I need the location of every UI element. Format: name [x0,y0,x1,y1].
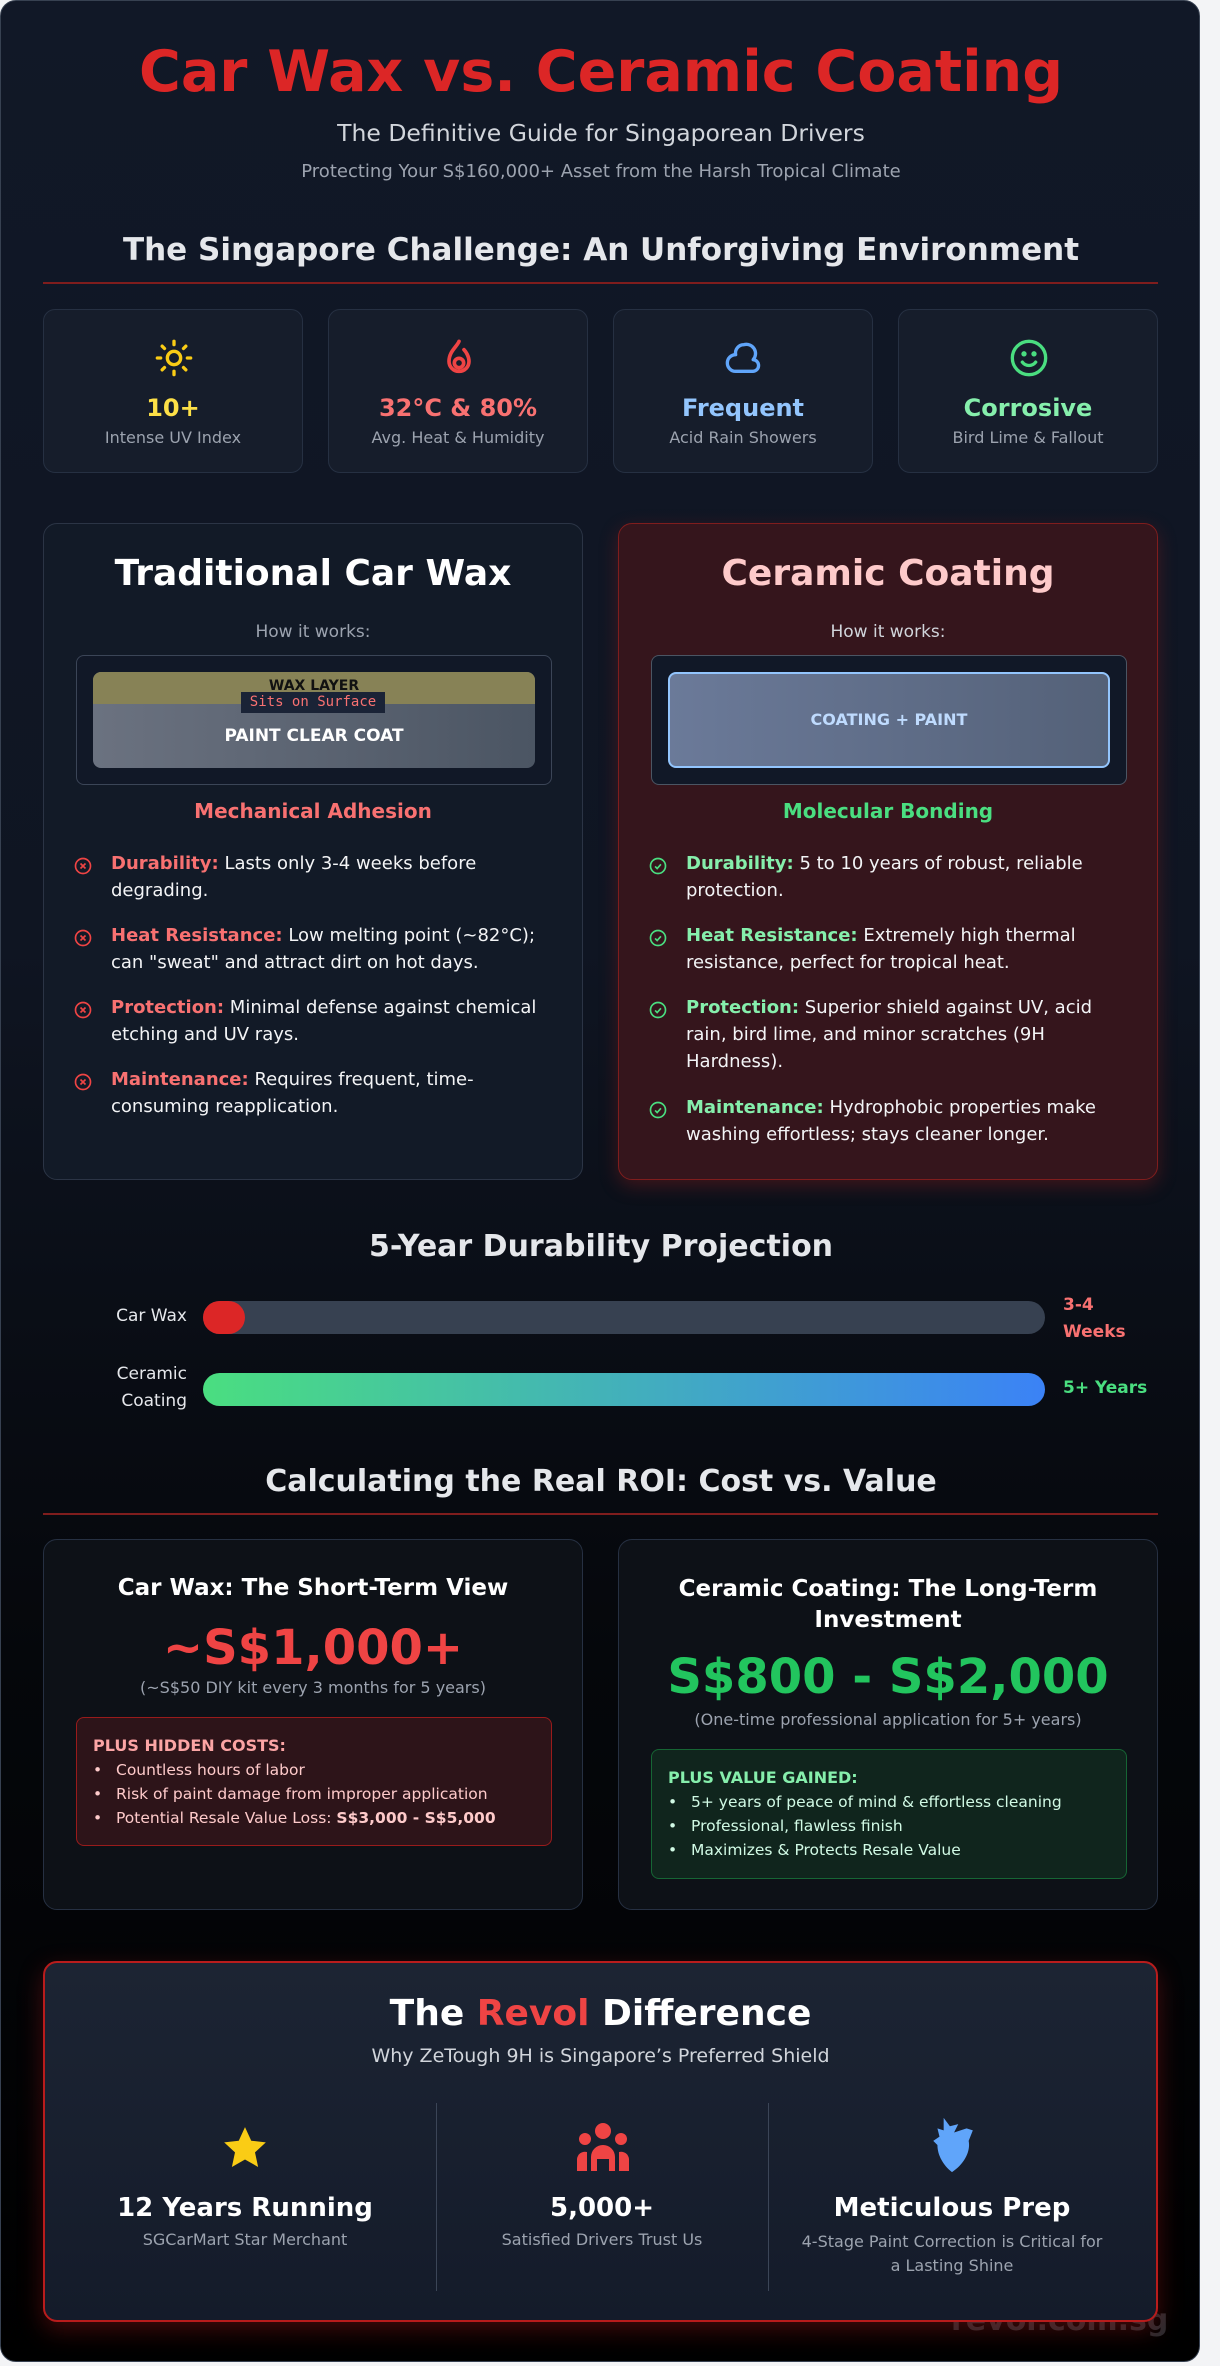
icon: shield [933,2118,973,2172]
value gained box: Maximizes & Protects Resale Value [691,1841,961,1859]
tagline: Protecting Your S$160,000+ Asset from the Harsh Tropical Climate [301,161,901,182]
value gained box [651,1749,1127,1879]
roi ceramic title [679,1576,1097,1633]
roi ceramic title: Ceramic Coating: The Long-Term [679,1576,1097,1602]
panel: ceramic coating: Heat Resistance: Extremely high thermal resistance, perfect for tropical heat. [686,925,1076,973]
stat: corrosive: Bird Lime & Fallout [952,428,1104,447]
panel: ceramic coating: Protection: Superior shield against UV, acid rain, bird lime, and minor scratches (9H Hardness). [686,997,1092,1072]
hidden costs box [76,1717,552,1846]
stat: rain: Frequent [682,394,804,422]
bar: ceramic: Ceramic [117,1364,187,1384]
stat: rain: Acid Rain Showers [669,428,817,447]
feature: drivers: 5,000+ [550,2193,654,2223]
feature: prep: a Lasting Shine [891,2256,1013,2275]
panel: ceramic coating [618,523,1158,1180]
stat: UV [43,309,303,473]
bar: car wax [116,1295,1126,1342]
panel: traditional car wax [43,523,583,1180]
icon: sun [156,340,192,376]
feature: prep [802,2118,1102,2275]
hidden costs box: PLUS HIDDEN COSTS: [93,1736,286,1755]
stat: UV: Intense UV Index [105,428,241,447]
icon: cloud [726,342,760,373]
heading: singapore challenge: The Singapore Challenge: An Unforgiving Environment [123,232,1079,268]
subtitle: The Definitive Guide for Singaporean Drivers [337,119,865,147]
ceramic points: Durability: 5 to 10 years of robust, reliable protection. [686,853,1083,901]
feature: years [117,2127,373,2249]
bar: ceramic: 5+ Years [1063,1378,1147,1398]
icon: people [577,2123,629,2171]
diagram: wax layer: WAX LAYER [269,678,359,694]
roi wax note: (~S$50 DIY kit every 3 months for 5 years) [140,1678,486,1697]
diagram: wax layer: Sits on Surface [250,694,376,710]
icon: flame [447,340,471,374]
how it works: How it works: [255,622,370,642]
feature: drivers: Satisfied Drivers Trust Us [502,2230,702,2249]
diagram: coating: COATING + PAINT [811,710,967,729]
bar chart: durability [116,1295,1147,1411]
stat: heat: Avg. Heat & Humidity [372,428,544,447]
hidden costs box: Countless hours of labor [116,1761,305,1779]
stat: rain [613,309,873,473]
roi wax price: ~S$1,000+ [163,1620,463,1676]
bar: ceramic: Coating [121,1391,187,1411]
feature: prep: 4-Stage Paint Correction is Critical for [802,2232,1102,2251]
feature: prep: Meticulous Prep [834,2193,1070,2223]
icon: smiley [1010,340,1048,376]
feature: drivers [502,2123,702,2249]
panel: ROI ceramic [618,1539,1158,1910]
panel: traditional car wax: Heat Resistance: Low melting point (~82°C); can "sweat" and attract dirt on hot days. [111,925,535,973]
roi ceramic price: S$800 - S$2,000 [667,1649,1109,1705]
stat: corrosive [898,309,1158,473]
value gained box: PLUS VALUE GAINED: [668,1768,858,1787]
feature: years: SGCarMart Star Merchant [143,2230,347,2249]
value gained box: Professional, flawless finish [691,1817,903,1835]
panel: revol difference [43,1961,1158,2322]
heading: durability projection: 5-Year Durability Projection [369,1229,833,1264]
molecular bonding: Molecular Bonding [783,799,993,823]
title: Car Wax vs. Ceramic Coating [139,39,1063,105]
wax points: Durability: Lasts only 3-4 weeks before degrading. [111,853,476,901]
roi ceramic title: Investment [814,1607,962,1633]
ceramic title: Ceramic Coating [722,553,1054,594]
bar: car wax: 3-4 [1063,1295,1094,1315]
panel: ROI car wax [43,1539,583,1910]
hidden costs box: Potential Resale Value Loss: S$3,000 - S$5,000 [116,1809,496,1827]
how it works: How it works: [830,622,946,642]
revol title: The Revol Difference [390,1993,811,2034]
panel: traditional car wax: Protection: Minimal defense against chemical etching and UV rays. [111,997,536,1045]
diagram: wax layer [76,655,552,785]
stat: heat [328,309,588,473]
hidden costs box: Risk of paint damage from improper application [116,1785,488,1803]
revol subtitle: Why ZeTough 9H is Singapore’s Preferred Shield [371,2045,830,2067]
panel: ceramic coating: Maintenance: Hydrophobic properties make washing effortless; stays cleaner longer. [686,1097,1096,1145]
roi ceramic note: (One-time professional application for 5+ years) [694,1710,1082,1729]
bar: car wax: Weeks [1063,1322,1126,1342]
stat: corrosive: Corrosive [964,394,1092,422]
diagram: wax layer: PAINT CLEAR COAT [224,726,404,746]
heading: ROI: Calculating the Real ROI: Cost vs. Value [265,1464,937,1499]
icon: star [224,2127,266,2167]
value gained box: 5+ years of peace of mind & effortless cleaning [691,1793,1062,1811]
watermark: revol.com.sg [951,2303,1168,2338]
panel: traditional car wax: Maintenance: Requires frequent, time-consuming reapplication. [111,1069,474,1117]
stat: UV: 10+ [146,394,200,422]
roi wax title: Car Wax: The Short-Term View [118,1575,508,1601]
stat: heat: 32°C & 80% [379,394,537,422]
bar: ceramic [117,1364,1147,1411]
mechanical adhesion: Mechanical Adhesion [194,799,432,823]
feature: years: 12 Years Running [117,2193,373,2223]
wax title: Traditional Car Wax [115,553,511,594]
diagram: coating [651,655,1127,785]
bar: car wax: Car Wax [116,1306,187,1326]
